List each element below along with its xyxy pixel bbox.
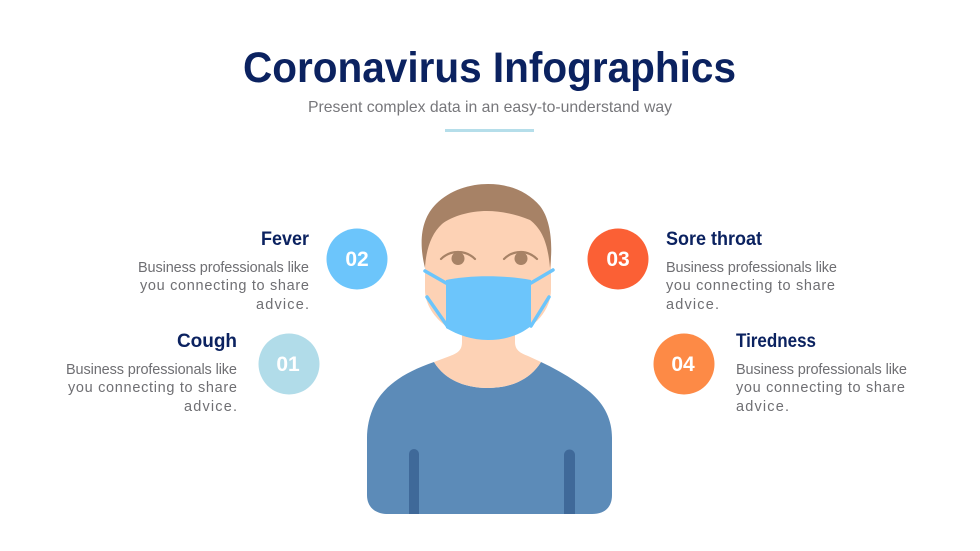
- shirt sleeve lines: [409, 449, 575, 514]
- description: Business professionals like: [66, 362, 237, 378]
- description: Business professionals like: [666, 260, 837, 276]
- badge 02: [326, 228, 388, 290]
- item: Fever: [138, 228, 388, 313]
- item: Tiredness: you connecting to share: [736, 380, 905, 396]
- item: Cough: 01: [276, 353, 300, 376]
- description: Business professionals like: [138, 260, 309, 276]
- item: Fever: 02: [345, 248, 369, 271]
- face mask: [446, 276, 531, 340]
- neck: [434, 330, 541, 388]
- title underline: [445, 129, 534, 132]
- shirt: [367, 362, 612, 514]
- item: Fever: you connecting to share: [140, 278, 309, 294]
- heading: Fever: [261, 229, 310, 250]
- mask straps: [425, 270, 553, 327]
- item: Tiredness: [654, 331, 907, 415]
- item: Cough: you connecting to share: [68, 380, 237, 396]
- title: Coronavirus Infographics: [243, 44, 736, 92]
- heading: Sore throat: [666, 229, 763, 250]
- item: Sore throat: advice.: [666, 297, 719, 313]
- face: [425, 200, 551, 340]
- item: Sore throat: 03: [606, 248, 630, 271]
- item: Cough: [66, 331, 320, 415]
- illustration: person wearing a mask: [367, 184, 612, 514]
- heading: Cough: [177, 331, 237, 352]
- description: Business professionals like: [736, 362, 907, 378]
- badge 04: [654, 334, 714, 394]
- item: Cough: advice.: [184, 399, 237, 415]
- badge 01: [258, 334, 320, 394]
- item: Tiredness: 04: [671, 353, 695, 376]
- item: Fever: advice.: [256, 297, 309, 313]
- item: Tiredness: advice.: [736, 399, 789, 415]
- item: Sore throat: you connecting to share: [666, 278, 835, 294]
- badge 03: [588, 228, 648, 290]
- subtitle: Present complex data in an easy-to-understand way: [308, 99, 672, 116]
- left eye: [441, 252, 475, 265]
- right eye: [504, 252, 537, 265]
- heading: Tiredness: [736, 331, 816, 352]
- item: Sore throat: [588, 228, 837, 313]
- hair: [422, 184, 551, 268]
